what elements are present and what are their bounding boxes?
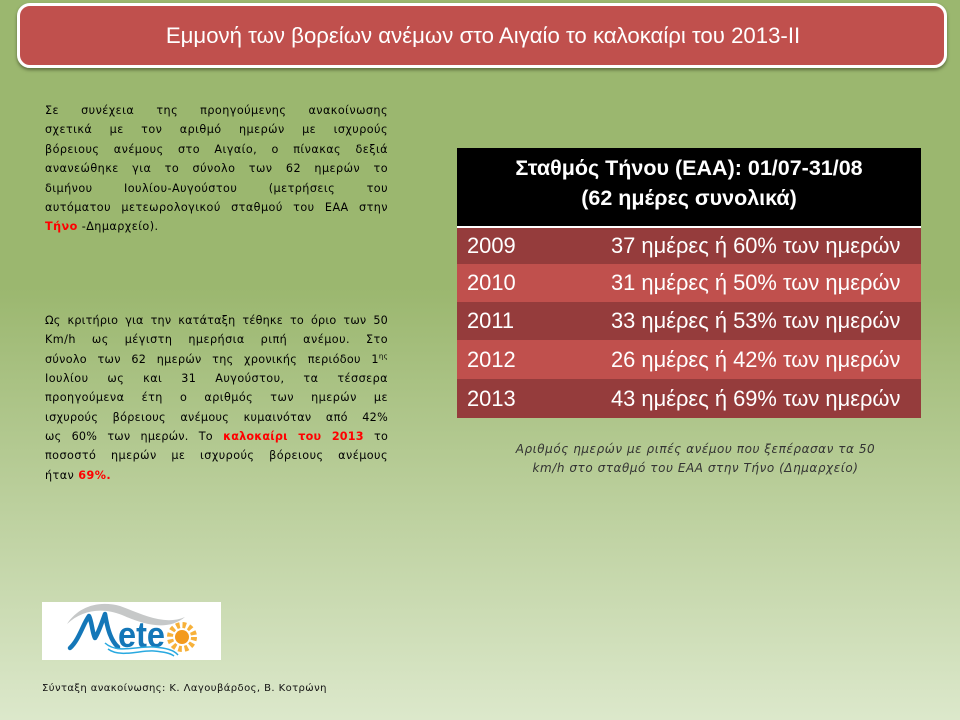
- text block: criterion and result: Ως κριτήριο για την κατάταξη τέθηκε το όριο των 50: [45, 314, 388, 327]
- row 2013: 2013: [467, 386, 516, 410]
- title banner: Εμμονή των βορείων ανέμων στο Αιγαίο το καλοκαίρι του 2013-II: [166, 23, 800, 48]
- text block: criterion and result: ως 60% των ημερών. Το καλοκαίρι του 2013 το: [45, 430, 388, 443]
- text block: introduction: ανανεώθηκε για το σύνολο των 62 ημερών το: [45, 162, 388, 175]
- text block: introduction: διμήνου Ιουλίου-Αυγούστου (μετρήσεις του: [45, 182, 388, 195]
- text block: introduction: αυτόματου μετεωρολογικού σταθμού του ΕΑΑ στην: [45, 201, 388, 214]
- text block: criterion and result: ποσοστό ημερών με ισχυρούς βόρειους ανέμους: [45, 449, 388, 462]
- text block: introduction: [45, 104, 388, 233]
- text block: criterion and result: Ιουλίου ως και 31 Αυγούστου, τα τέσσερα: [45, 372, 388, 385]
- text block: criterion and result: σύνολο των 62 ημερών της χρονικής περιόδου 1ης: [45, 352, 388, 366]
- table header divider: [457, 226, 921, 228]
- row 2009: 37 ημέρες ή 60% των ημερών: [611, 233, 900, 258]
- row 2010: [457, 264, 921, 302]
- text block: criterion and result: [45, 314, 388, 482]
- table caption: Αριθμός ημερών με ριπές ανέμου που ξεπέρασαν τα 50: [516, 442, 875, 456]
- text block: criterion and result: προηγούμενα έτη ο αριθμός των ημερών με: [45, 391, 388, 404]
- row 2010: 2010: [467, 270, 516, 295]
- row 2013: 43 ημέρες ή 69% των ημερών: [611, 386, 900, 410]
- logo: Meteo: [42, 602, 221, 660]
- table header: (62 ημέρες συνολικά): [581, 186, 797, 210]
- text block: introduction: Σε συνέχεια της προηγούμενης ανακοίνωσης: [45, 104, 388, 117]
- table caption: km/h στο σταθμό του ΕΑΑ στην Τήνο (Δημαρχείο): [533, 461, 858, 475]
- row 2011: [457, 302, 921, 340]
- text block: introduction: σχετικά με τον αριθμό ημερών με ισχυρούς: [45, 123, 388, 136]
- text block: introduction: βόρειους ανέμους στο Αιγαίο, ο πίνακας δεξιά: [45, 143, 388, 156]
- row 2010: 31 ημέρες ή 50% των ημερών: [611, 270, 900, 295]
- title banner: [17, 3, 947, 68]
- table header: Σταθμός Τήνου (ΕΑΑ): 01/07-31/08: [515, 156, 863, 180]
- text block: criterion and result: ισχυρούς βόρειους ανέμους κυμαινόταν από 42%: [45, 411, 388, 424]
- row 2009: 2009: [467, 233, 516, 258]
- text block: criterion and result: ήταν 69%.: [45, 469, 111, 482]
- row 2012: [457, 340, 921, 379]
- row 2012: 2012: [467, 346, 516, 372]
- text block: introduction: Τήνο -Δημαρχείο).: [45, 220, 159, 233]
- logo: Meteo: ete: [118, 614, 165, 655]
- row 2011: 2011: [467, 308, 514, 333]
- row 2012: 26 ημέρες ή 42% των ημερών: [611, 346, 900, 372]
- table caption: [515, 442, 875, 475]
- credits: Σύνταξη ανακοίνωσης: Κ. Λαγουβάρδος, Β. Κοτρώνη: [42, 683, 327, 694]
- text block: criterion and result: Km/h ως μέγιστη ημερήσια ριπή ανέμου. Στο: [45, 333, 388, 346]
- table header: [457, 148, 921, 226]
- row 2013: [457, 379, 921, 418]
- row 2011: 33 ημέρες ή 53% των ημερών: [611, 308, 900, 333]
- row 2009: [457, 228, 921, 264]
- table: days with strong winds at Tinos station: [457, 148, 921, 226]
